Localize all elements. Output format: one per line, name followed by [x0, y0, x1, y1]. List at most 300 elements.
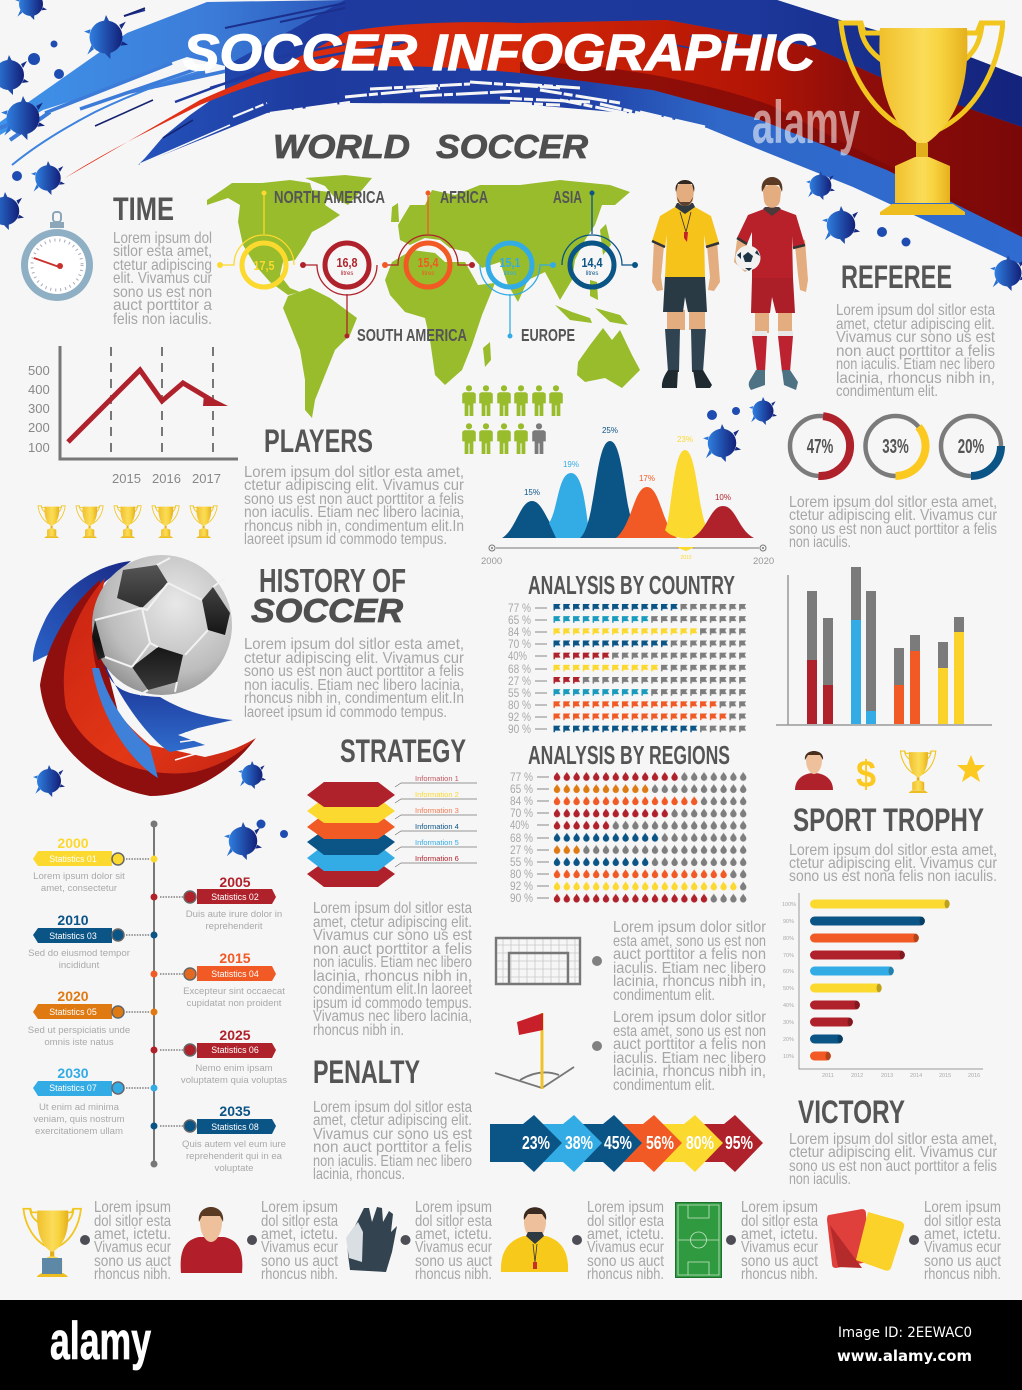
- timeline item 2025: 2025: [219, 1027, 251, 1043]
- arms: [652, 240, 720, 291]
- text: sport trophy: ctetur adipiscing elit. Vivamus cur: [789, 855, 998, 872]
- text: history: ctetur adipiscing elit. Vivamus cur: [244, 650, 465, 667]
- map region labels: NORTH AMERICA: [274, 187, 385, 207]
- column 4: [587, 1199, 665, 1283]
- timeline item 2020: Statistics 05: [49, 1007, 97, 1017]
- column 2: Vivamus ecur: [261, 1239, 339, 1256]
- text: referee: non auct porttitor a felis: [836, 343, 995, 360]
- bottom icon row: [23, 1202, 919, 1278]
- column 3: amet, ictetu.: [415, 1226, 492, 1243]
- south america marker: [300, 243, 377, 338]
- text: corner: lacinia, rhoncus nibh in,: [613, 1063, 766, 1080]
- column 5: sono us auct: [741, 1253, 818, 1270]
- blue outer swirl: [33, 561, 131, 662]
- column 2: sono us auct: [261, 1253, 338, 1270]
- timeline item 2010: 2010: [57, 912, 89, 928]
- legs: [667, 310, 705, 330]
- icon: corner flag: [495, 1013, 574, 1089]
- south america marker: litres: [341, 271, 353, 277]
- text: corner: auct porttitor a felis non: [613, 1036, 766, 1053]
- column 3: Lorem ipsum: [415, 1199, 492, 1216]
- heading: world soccer: SOCCER: [436, 128, 588, 165]
- map region labels: AFRICA: [440, 187, 488, 207]
- text: referee: Lorem ipsum dol sitlor esta: [836, 302, 995, 319]
- flag matrix: 68 %: [508, 662, 531, 676]
- text: penalty: Vivamus cur sono us est: [313, 1126, 472, 1143]
- text: strategy: rhoncus nibh in.: [313, 1022, 404, 1039]
- bell curve chart: 23%: [677, 435, 693, 444]
- text: strategy: ipsum id commodo tempus.: [313, 995, 472, 1012]
- shirt: [737, 209, 805, 278]
- text: penalty: non auct porttitor a felis: [313, 1139, 472, 1156]
- timeline item 2025: [150, 1027, 287, 1086]
- text: strategy: Vivamus nec libero lacinia,: [313, 1008, 472, 1025]
- timeline item 2005: reprehenderit: [205, 921, 263, 932]
- timeline item 2005: Statistics 02: [211, 892, 259, 902]
- text: time: felis non iaculis.: [113, 311, 212, 328]
- text: goal: [613, 919, 767, 1004]
- text: history: non iaculis. Etiam nec libero lacinia,: [244, 677, 464, 694]
- column 3: rhoncus nibh.: [415, 1266, 492, 1283]
- text: strategy: non iaculis. Etiam nec libero: [313, 954, 472, 971]
- icon: trophy: [23, 1209, 90, 1277]
- arrow percentage strip: 80%: [686, 1133, 714, 1153]
- column 1: Vivamus ecur: [94, 1239, 172, 1256]
- heading: analysis by regions: ANALYSIS BY REGIONS: [528, 740, 730, 770]
- icon: soccer field: [676, 1202, 736, 1278]
- heading: analysis by country: ANALYSIS BY COUNTRY: [528, 570, 735, 600]
- text: time: sono us est non: [113, 284, 212, 301]
- column 2: Lorem ipsum: [261, 1199, 338, 1216]
- light blue streak: [92, 668, 158, 778]
- map region labels: SOUTH AMERICA: [357, 325, 467, 345]
- column 1: amet, ictetu.: [94, 1226, 171, 1243]
- timeline item 2015: [150, 950, 285, 1009]
- arrow percentage strip: 45%: [604, 1133, 632, 1153]
- column 3: [415, 1199, 493, 1283]
- icon: goalkeeper glove: [346, 1207, 410, 1272]
- timeline item 2030: [33, 1065, 158, 1137]
- timeline item 2035: Statistics 08: [211, 1122, 259, 1132]
- arms: [734, 236, 808, 292]
- text: sport trophy: Lorem ipsum dol sitlor esta amet,: [789, 842, 997, 859]
- red band: [65, 20, 1022, 237]
- drop matrix: 84 %: [510, 794, 533, 808]
- flag matrix: 80 %: [508, 698, 531, 712]
- donut charts: 47%: [807, 436, 833, 458]
- text: strategy: lacinia, rhoncus nibh in,: [313, 968, 472, 985]
- flag matrix: 84 %: [508, 625, 531, 639]
- column 3: Vivamus ecur: [415, 1239, 493, 1256]
- column 1: dol sitlor esta: [94, 1213, 171, 1230]
- horizontal bar chart: 2011: [822, 1073, 834, 1079]
- asia marker: [562, 190, 638, 287]
- column 6: amet, ictetu.: [924, 1226, 1001, 1243]
- referee figure: [652, 180, 720, 388]
- bullet goal: [592, 956, 602, 966]
- bullet corner: [592, 1041, 602, 1051]
- people pictogram: [462, 385, 563, 454]
- europe marker: litres: [504, 271, 516, 277]
- timeline item 2005: Duis aute irure dolor in: [186, 909, 282, 920]
- timeline item 2015: 2015: [219, 950, 251, 966]
- bell curve chart: 15%: [524, 488, 540, 497]
- horizontal bar chart: 90%: [783, 919, 794, 925]
- north america marker: 17,5: [254, 258, 274, 273]
- timeline item 2035: voluptate: [215, 1163, 253, 1174]
- heading: referee: REFEREE: [841, 259, 952, 295]
- flag matrix: 90 %: [508, 722, 531, 736]
- text: donuts: ctetur adipiscing elit. Vivamus cur: [789, 507, 998, 524]
- text: goal: esta amet, sono us est non: [613, 933, 766, 950]
- timeline item 2025: Statistics 06: [211, 1045, 259, 1055]
- timeline item 2005: [150, 874, 282, 932]
- footer bar: [0, 1300, 1022, 1390]
- horizontal bar chart: 100%: [782, 902, 796, 908]
- timeline item 2035: [150, 1103, 286, 1174]
- column 2: dol sitlor esta: [261, 1213, 338, 1230]
- timeline item 2030: exercitationem ullam: [35, 1126, 123, 1137]
- text: strategy: Vivamus cur sono us est: [313, 927, 472, 944]
- text: players: Lorem ipsum dol sitlor esta amet,: [244, 464, 464, 481]
- heading: time: TIME: [113, 191, 174, 227]
- icon: goal net: [495, 937, 581, 985]
- flag matrix: 77 %: [508, 601, 531, 615]
- timeline item 2010: Sed do eiusmod tempor: [28, 948, 131, 959]
- drop matrix: 27 %: [510, 843, 533, 857]
- timeline item 2030: Ut enim ad minima: [39, 1102, 120, 1113]
- text: goal: condimentum elit.: [613, 987, 715, 1004]
- strategy hexagon stack: Information 6: [415, 854, 459, 863]
- text: corner: Lorem ipsum dolor sitlor: [613, 1009, 767, 1026]
- arrow percentage strip: 23%: [522, 1133, 550, 1153]
- text: goal: iaculis. Etiam nec libero: [613, 960, 766, 977]
- text: referee: condimentum elit.: [836, 383, 938, 400]
- timeline item 2035: reprehenderit qui in ea: [186, 1151, 283, 1162]
- timeline item 2020: [28, 988, 158, 1048]
- timeline item 2020: omnis iste natus: [44, 1037, 114, 1048]
- drop matrix: 80 %: [510, 867, 533, 881]
- sport icons row: [795, 751, 985, 796]
- text: history: laoreet ipsum id commodo tempus.: [244, 704, 447, 721]
- text: strategy: non auct porttitor a felis: [313, 941, 472, 958]
- map region labels: EUROPE: [521, 325, 575, 345]
- line chart: 2017: [192, 471, 221, 486]
- strategy hexagon stack: [307, 774, 477, 887]
- text: penalty: non iaculis. Etiam nec libero: [313, 1153, 472, 1170]
- drop matrix: [510, 770, 748, 905]
- horizontal bar chart: 2016: [968, 1073, 980, 1079]
- text: penalty: amet, ctetur adipiscing elit.: [313, 1112, 472, 1129]
- text: strategy: [313, 900, 472, 1039]
- heading: history of soccer: [251, 562, 406, 629]
- bell curve chart: [481, 426, 774, 567]
- horizontal bar chart: [782, 893, 983, 1079]
- line chart: 2016: [152, 471, 181, 486]
- timeline item 2015: Statistics 04: [211, 969, 259, 979]
- timeline item 2035: Quis autem vel eum iure: [182, 1139, 286, 1150]
- column 6: dol sitlor esta: [924, 1213, 1001, 1230]
- heading: world soccer: [273, 128, 588, 165]
- column 5: amet, ictetu.: [741, 1226, 818, 1243]
- text: corner: condimentum elit.: [613, 1077, 715, 1094]
- asia marker: litres: [586, 271, 598, 277]
- europe marker: [480, 243, 556, 338]
- strategy hexagon stack: Information 4: [415, 822, 459, 831]
- icon: referee bust: [501, 1207, 582, 1272]
- column 3: dol sitlor esta: [415, 1213, 492, 1230]
- column 5: Lorem ipsum: [741, 1199, 818, 1216]
- text: referee: lacinia, rhoncus nibh in,: [836, 370, 995, 387]
- white splatter: [233, 82, 705, 127]
- horizontal bar chart: 2015: [939, 1073, 951, 1079]
- head: [763, 184, 781, 208]
- footer bar: alamy: [50, 1312, 151, 1371]
- text: strategy: condimentum elit.In laoreet: [313, 981, 472, 998]
- bar chart stacked: [776, 567, 992, 725]
- heading: history of soccer: HISTORY OF: [259, 562, 406, 599]
- head: [676, 182, 694, 206]
- column 6: [924, 1199, 1002, 1283]
- text: victory: ctetur adipiscing elit. Vivamus cur: [789, 1144, 998, 1161]
- timeline item 2000: [33, 835, 158, 894]
- text: players: ctetur adipiscing elit. Vivamus cur: [244, 477, 465, 494]
- text: time: Lorem ipsum dol: [113, 230, 212, 247]
- timeline item 2035: 2035: [219, 1103, 251, 1119]
- heading: players: PLAYERS: [264, 423, 373, 459]
- timeline item 2020: 2020: [57, 988, 89, 1004]
- flag matrix: 65 %: [508, 613, 531, 627]
- text: goal: auct porttitor a felis non: [613, 946, 766, 963]
- text: corner: [613, 1009, 767, 1094]
- timeline item 2015: cupidatat non proident: [187, 998, 282, 1009]
- grey drops: [581, 771, 748, 905]
- column 1: rhoncus nibh.: [94, 1266, 171, 1283]
- bell curve chart: 19%: [563, 460, 579, 469]
- horizontal bar chart: 2013: [881, 1073, 893, 1079]
- timeline item 2010: Statistics 03: [49, 931, 97, 941]
- footer bar: www.alamy.com: [837, 1347, 972, 1365]
- column 6: rhoncus nibh.: [924, 1266, 1001, 1283]
- icon: red and yellow cards: [827, 1209, 919, 1271]
- horizontal bar chart: 20%: [783, 1037, 794, 1043]
- map data circles: [217, 190, 638, 338]
- arrow percentage strip: 56%: [646, 1133, 674, 1153]
- column 5: Vivamus ecur: [741, 1239, 819, 1256]
- arrow percentage strip: 95%: [725, 1133, 753, 1153]
- central blue mass: [138, 0, 1022, 265]
- horizontal bar chart: 2012: [851, 1073, 863, 1079]
- flag matrix: 92 %: [508, 710, 531, 724]
- timeline item 2010: incididunt: [59, 960, 100, 971]
- text: goal: Lorem ipsum dolor sitlor: [613, 919, 767, 936]
- text: corner: iaculis. Etiam nec libero: [613, 1050, 766, 1067]
- africa marker: litres: [422, 271, 434, 277]
- player figure with ball: [734, 177, 808, 390]
- drop matrix: 90 %: [510, 891, 533, 905]
- drop matrix: 68 %: [510, 831, 533, 845]
- timeline item 2010: [28, 912, 158, 971]
- heading: history of soccer: SOCCER: [251, 592, 403, 629]
- ball: [736, 246, 760, 270]
- column 4: Vivamus ecur: [587, 1239, 665, 1256]
- heading: victory: VICTORY: [798, 1094, 905, 1130]
- text: sport trophy: sono us est nona felis non iaculis.: [789, 868, 997, 885]
- top dark band: [345, 0, 1022, 127]
- flag matrix: 27 %: [508, 674, 531, 688]
- strategy hexagon stack: Information 2: [415, 790, 459, 799]
- text: history: rhoncus nibh in, condimentum elit.In: [244, 690, 464, 707]
- text: strategy: Lorem ipsum dol sitlor esta: [313, 900, 472, 917]
- text: strategy: amet, ctetur adipiscing elit.: [313, 914, 472, 931]
- world map: [207, 175, 640, 418]
- timeline item 2025: voluptatem quia voluptas: [181, 1075, 287, 1086]
- timeline item 2000: Lorem ipsum dolor sit: [33, 871, 125, 882]
- column 4: amet, ictetu.: [587, 1226, 664, 1243]
- heading: world soccer: WORLD: [273, 128, 410, 165]
- heading: penalty: PENALTY: [313, 1054, 420, 1090]
- south america marker: 16,8: [336, 255, 358, 270]
- ball: [92, 555, 232, 695]
- header brush stroke band: [0, 0, 1022, 265]
- drop matrix: 40%: [510, 818, 529, 832]
- strategy hexagon stack: Information 3: [415, 806, 459, 815]
- horizontal bar chart: 10%: [783, 1054, 794, 1060]
- line chart: 100: [28, 440, 50, 455]
- text: history: [244, 636, 465, 721]
- bell curve chart: 2020: [753, 556, 774, 567]
- text: donuts: [789, 494, 998, 551]
- timeline item 2005: 2005: [219, 874, 251, 890]
- column 1: Lorem ipsum: [94, 1199, 171, 1216]
- text: victory: [789, 1131, 998, 1188]
- horizontal bar chart: 60%: [783, 969, 794, 975]
- text: sport trophy: [789, 842, 998, 885]
- coloured drops: [552, 771, 738, 905]
- text: players: laoreet ipsum id commodo tempus.: [244, 531, 447, 548]
- column 1: sono us auct: [94, 1253, 171, 1270]
- timeline item 2025: Nemo enim ipsam: [195, 1063, 273, 1074]
- text: victory: Lorem ipsum dol sitlor esta amet,: [789, 1131, 997, 1148]
- timeline item 2000: Statistics 01: [49, 854, 97, 864]
- text: penalty: Lorem ipsum dol sitlor esta: [313, 1099, 472, 1116]
- drop matrix: 92 %: [510, 879, 533, 893]
- text: time: [113, 230, 213, 328]
- text: players: sono us est non auct porttitor a felis: [244, 491, 464, 508]
- line chart: 2015: [112, 471, 141, 486]
- column 5: rhoncus nibh.: [741, 1266, 818, 1283]
- donut charts: 33%: [882, 436, 909, 458]
- icon: stopwatch: [21, 212, 93, 301]
- drop matrix: 55 %: [510, 855, 533, 869]
- strategy hexagon stack: Information 5: [415, 838, 459, 847]
- text: players: rhoncus nibh in, condimentum elit.In: [244, 518, 464, 535]
- blue inner swirl: [103, 660, 233, 752]
- shorts: [751, 278, 795, 313]
- bell curve chart: 25%: [602, 426, 618, 435]
- drop matrix: 70 %: [510, 806, 533, 820]
- flag matrix: 40%: [508, 649, 527, 663]
- text: victory: non iaculis.: [789, 1171, 851, 1188]
- timeline item 2030: 2030: [57, 1065, 89, 1081]
- flag matrix: 70 %: [508, 637, 531, 651]
- column 6: Vivamus ecur: [924, 1239, 1002, 1256]
- bell curve chart: 2010: [680, 555, 692, 561]
- text: time: auct porttitor a: [113, 297, 212, 314]
- text: donuts: Lorem ipsum dol sitlor esta amet,: [789, 494, 997, 511]
- streaks through red: [175, 36, 740, 102]
- text: players: non iaculis. Etiam nec libero lacinia,: [244, 504, 464, 521]
- text: penalty: [313, 1099, 472, 1183]
- horizontal bar chart: 70%: [783, 953, 794, 959]
- horizontal bar chart: 50%: [783, 986, 794, 992]
- timeline item 2030: veniam, quis nostrum: [33, 1114, 125, 1125]
- timeline: [28, 820, 287, 1174]
- timeline item 2020: Sed ut perspiciatis unde: [28, 1025, 130, 1036]
- column 4: dol sitlor esta: [587, 1213, 664, 1230]
- text: players: [244, 464, 465, 548]
- africa marker: 15,4: [418, 255, 439, 270]
- light blue streaks: [0, 0, 345, 165]
- bottom text columns: [94, 1199, 1002, 1283]
- drop matrix: 77 %: [510, 770, 533, 784]
- coloured flags: [553, 603, 729, 737]
- icon: gold trophy: [841, 23, 1003, 215]
- africa marker: [382, 190, 475, 287]
- arrow percentage strip: 38%: [565, 1133, 593, 1153]
- flag matrix: [508, 601, 748, 737]
- bell curve chart: 10%: [715, 493, 731, 502]
- strategy hexagon stack: Information 1: [415, 774, 459, 783]
- column 4: sono us auct: [587, 1253, 664, 1270]
- asia marker: 14,4: [582, 255, 603, 270]
- donut charts: 20%: [958, 436, 984, 458]
- watermark: alamy: [752, 89, 860, 156]
- horizontal bar chart: 30%: [783, 1020, 794, 1026]
- bell curve chart: 17%: [639, 474, 655, 483]
- text: corner: esta amet, sono us est non: [613, 1023, 766, 1040]
- timeline item 2030: Statistics 07: [49, 1083, 97, 1093]
- small trophies row: [38, 506, 217, 538]
- heading: strategy: STRATEGY: [340, 733, 466, 769]
- horizontal bar chart: 80%: [783, 936, 794, 942]
- shorts: [663, 277, 707, 312]
- arrow percentage strip: [490, 1115, 763, 1172]
- bright red swirl: [64, 578, 256, 773]
- column 2: [261, 1199, 339, 1283]
- line chart: 200: [28, 420, 50, 435]
- bell curve chart: 2000: [481, 556, 502, 567]
- soccer ball with swirl: [33, 555, 256, 796]
- text: time: sitlor esta amet,: [113, 243, 212, 260]
- column 5: dol sitlor esta: [741, 1213, 818, 1230]
- column 5: [741, 1199, 819, 1283]
- title: SOCCER INFOGRAPHIC: [183, 24, 816, 81]
- column 2: amet, ictetu.: [261, 1226, 338, 1243]
- icon: player bust: [181, 1207, 257, 1273]
- line chart: [28, 346, 238, 486]
- timeline item 2015: Excepteur sint occaecat: [183, 986, 285, 997]
- europe marker: 15,1: [500, 255, 520, 270]
- flag matrix: 55 %: [508, 686, 531, 700]
- column 3: sono us auct: [415, 1253, 492, 1270]
- sport icons row: $: [856, 754, 876, 796]
- grey flags: [582, 603, 748, 737]
- text: time: elit. Vivamus cur: [113, 270, 213, 287]
- text: time: ctetur adipiscing: [113, 257, 212, 274]
- text: history: Lorem ipsum dol sitlor esta amet,: [244, 636, 464, 653]
- column 6: Lorem ipsum: [924, 1199, 1001, 1216]
